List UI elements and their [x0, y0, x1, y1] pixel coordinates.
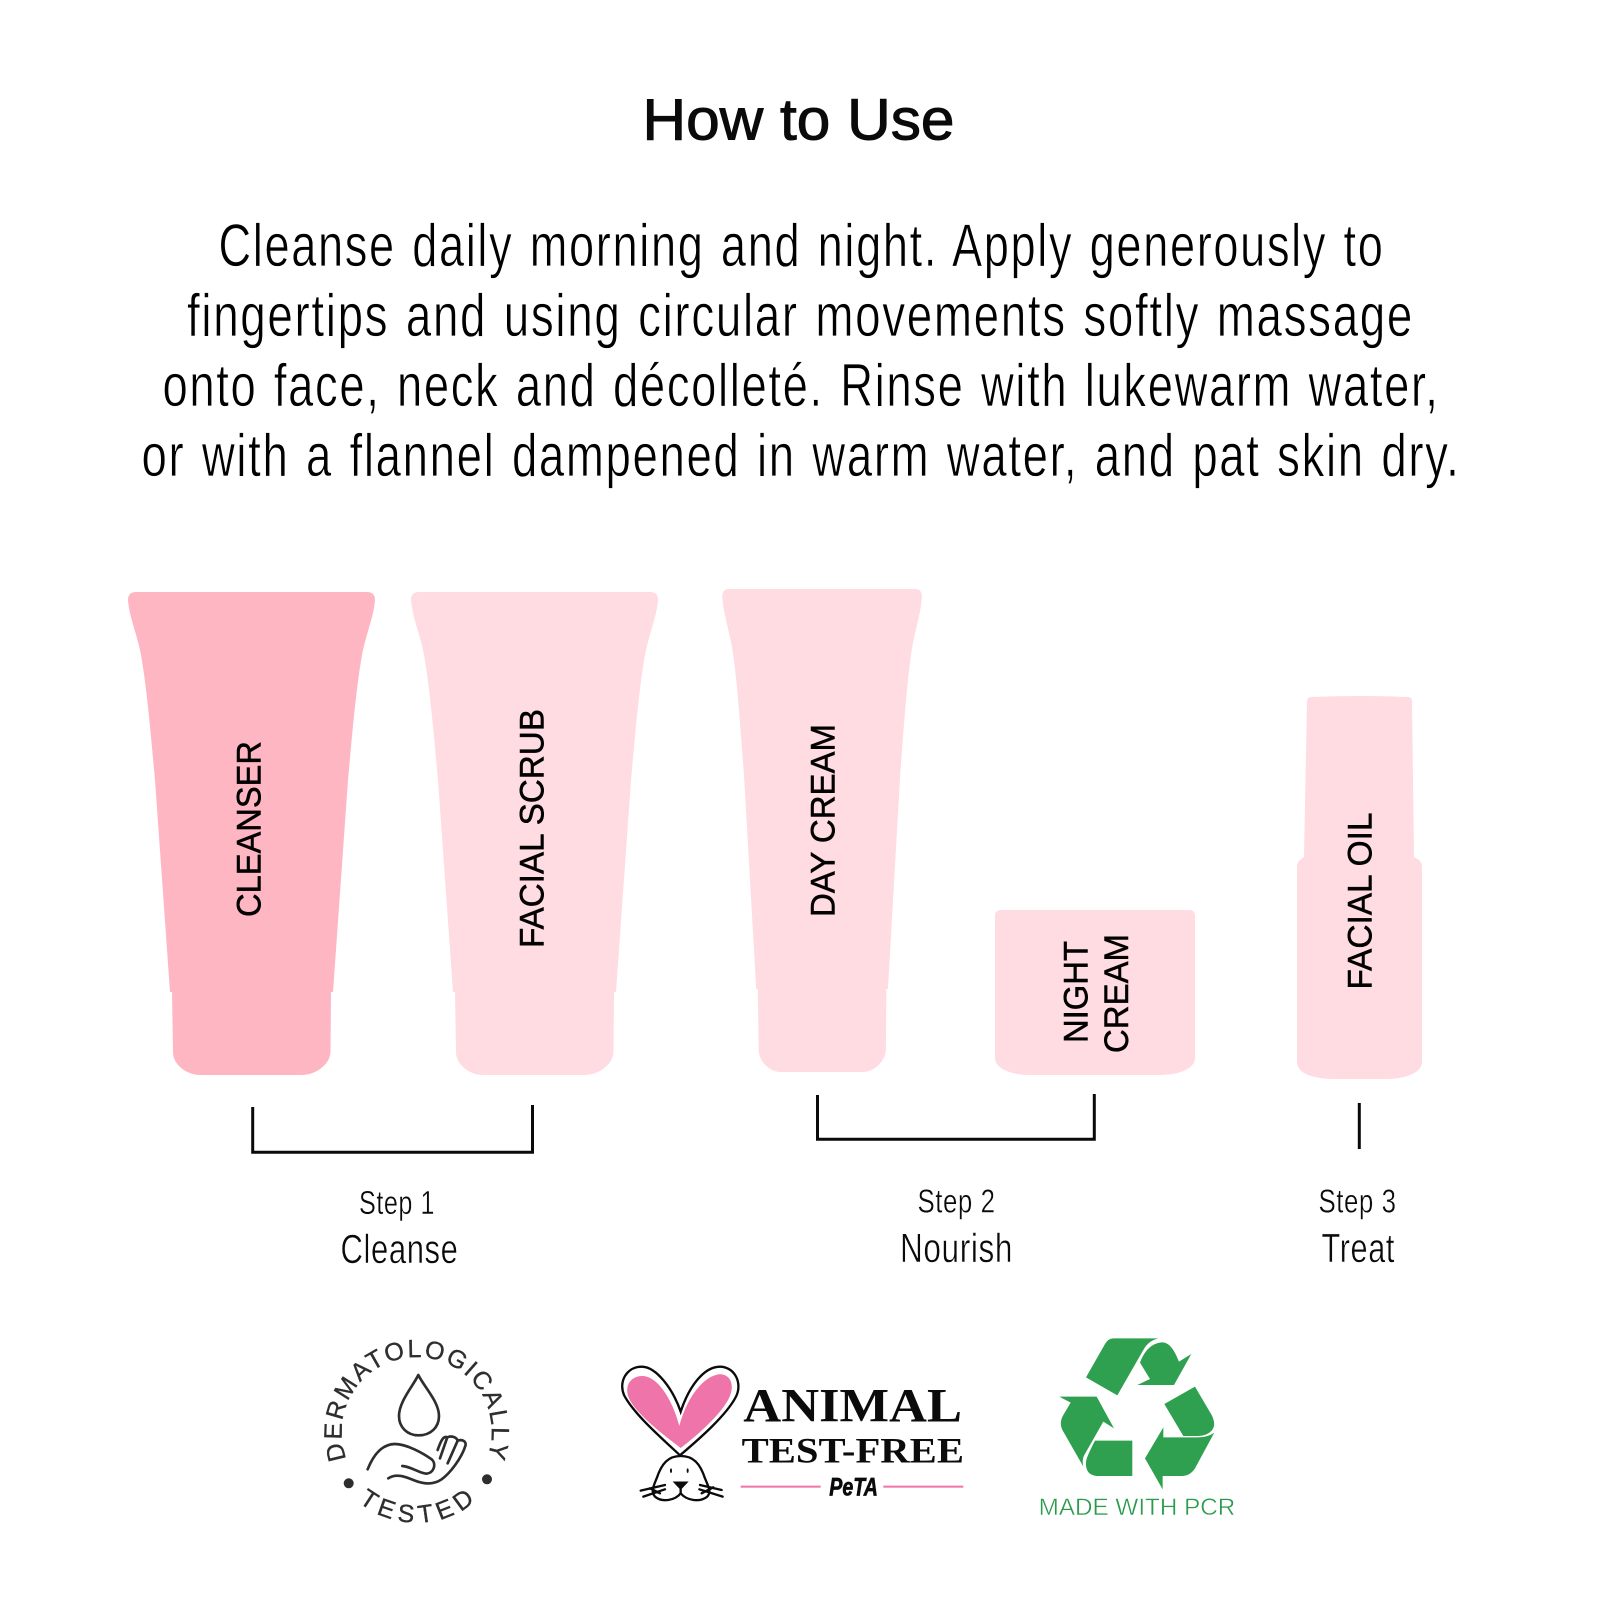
pcr caption: MADE WITH PCR [1039, 1494, 1235, 1521]
recycling arrows [1059, 1338, 1214, 1489]
step 3 label [1318, 1182, 1396, 1271]
bunny ears [622, 1367, 738, 1455]
product: night cream jar: NIGHT [1058, 941, 1096, 1043]
instructions text block [142, 211, 1460, 489]
peta wordmark with pink rules: PeTA [829, 1473, 878, 1501]
product: day cream tube: DAY CREAM [804, 724, 842, 917]
bracket: step 3 [1358, 1103, 1361, 1149]
product: facial oil bottle: FACIAL OIL [1342, 812, 1380, 990]
product: cleanser tube: CLEANSER [230, 741, 268, 917]
test-free text: TEST-FREE [742, 1431, 964, 1471]
product: facial oil bottle [1297, 696, 1422, 1079]
step 1 label: Cleanse [340, 1226, 458, 1272]
pink heart [627, 1374, 732, 1448]
logo: peta animal test-free [622, 1367, 964, 1501]
product: facial scrub tube [411, 592, 658, 1075]
bracket: step 2 [818, 1094, 1094, 1139]
step 1 label: Step 1 [359, 1184, 435, 1221]
animal text: ANIMAL [743, 1380, 962, 1433]
bunny face [641, 1456, 723, 1500]
logo: recycling made with pcr [1039, 1338, 1235, 1521]
step 2 label [900, 1182, 1013, 1271]
badge dots [344, 1474, 492, 1488]
step 2 label: Nourish [900, 1225, 1013, 1271]
step 3 label: Treat [1322, 1225, 1395, 1271]
step 2 label: Step 2 [918, 1182, 996, 1220]
step 3 label: Step 3 [1318, 1182, 1396, 1220]
badge: dermatologically tested [324, 1340, 510, 1522]
product: night cream jar [995, 910, 1195, 1075]
icon: water drop over hand [368, 1375, 466, 1483]
badge lower text: TESTED [364, 1488, 472, 1522]
step 1 label [340, 1184, 458, 1272]
product: night cream jar: CREAM [1098, 934, 1136, 1053]
product: facial scrub tube: FACIAL SCRUB [514, 709, 552, 948]
bracket: step 1 [253, 1105, 532, 1152]
product: cleanser tube [128, 592, 375, 1075]
product: day cream tube [722, 589, 922, 1072]
badge circular text: DERMATOLOGICALLY [324, 1340, 510, 1462]
title: How to Use [642, 88, 954, 152]
